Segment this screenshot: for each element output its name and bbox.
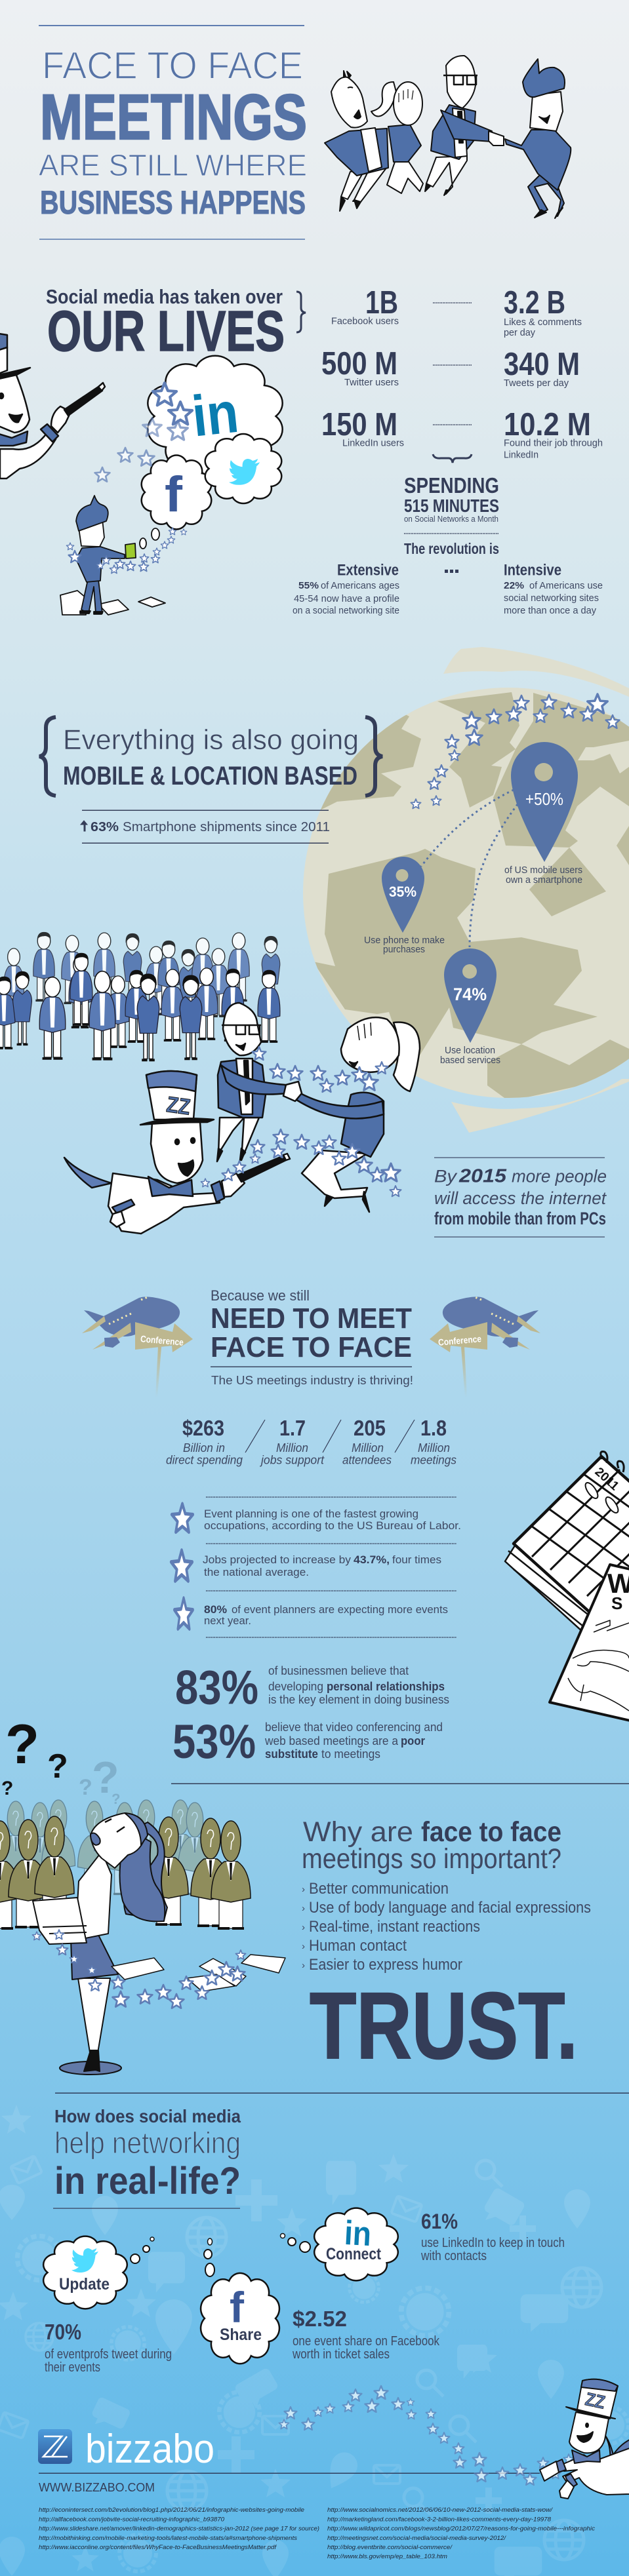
stat: attendees: Million xyxy=(352,1441,384,1454)
fact: fastest growing occupation xyxy=(172,1504,461,1532)
stat: 70 percent twitter: of eventprofs tweet during xyxy=(45,2347,172,2362)
heading: social media has taken over our lives: Social media has taken over xyxy=(46,285,283,308)
illustration: faceless crowd with question marks xyxy=(0,1713,251,1930)
statistic: 83 percent personal relationships: personal relationships xyxy=(327,1680,445,1693)
figure: woman with ponytail xyxy=(371,82,423,193)
stat: 2.52 dollars facebook: $2.52 xyxy=(293,2307,347,2331)
extensive xyxy=(293,561,399,616)
figure: bald man with glasses xyxy=(425,56,504,195)
crescent: bottom arc xyxy=(451,1079,629,1133)
illustration: man with smartphone xyxy=(60,496,165,615)
crescent: top arc xyxy=(443,647,629,697)
statistic: 83 percent personal relationships xyxy=(175,1661,449,1715)
heading: need to meet face to face: Because we still xyxy=(211,1287,310,1304)
bizzabo logo xyxy=(38,2427,214,2472)
cloud: twitter update: Update xyxy=(59,2275,110,2293)
ponytail xyxy=(124,1822,167,1921)
stat: direct spending: direct spending xyxy=(166,1454,243,1467)
map pin: 74 percent xyxy=(440,948,500,1066)
cloud: facebook: f xyxy=(165,467,183,522)
map pin: 35 percent: Use phone to make xyxy=(364,935,445,946)
stat: likes and comments xyxy=(504,285,582,338)
extensive: on a social networking site xyxy=(293,605,399,616)
heading and reasons: why face to face: Why are xyxy=(303,1816,413,1848)
callout: by 2015: 2015 xyxy=(458,1165,507,1186)
front row xyxy=(0,1816,251,1930)
cloud: linkedin connect: in xyxy=(344,2214,373,2254)
stat: jobs support xyxy=(259,1416,325,1467)
extensive: Extensive xyxy=(337,561,399,579)
sources column left: http://allfacebook.com/jobvite-social-recruiting-infographic_b93870 xyxy=(39,2516,224,2522)
stars around clouds xyxy=(66,383,192,574)
heading: need to meet face to face xyxy=(211,1287,413,1387)
stat: likes and comments: 3.2 B xyxy=(504,285,565,321)
callout: by 2015: By xyxy=(434,1167,458,1186)
stat: meetings: 1.8 xyxy=(420,1416,447,1440)
stat: 2.52 dollars facebook xyxy=(292,2307,440,2362)
stat: likes and comments: Likes & comments xyxy=(504,317,582,328)
sources column left: http://econintersect.com/b2evolution/blog1.php/2012/06/21/infographic-websites-going-mobile xyxy=(39,2507,304,2513)
map pin: 74 percent: based services xyxy=(440,1055,500,1066)
illustration: social network thought clouds xyxy=(142,356,283,529)
illustration: magician flying with wand: ZZ xyxy=(165,1092,192,1120)
land masses xyxy=(308,692,629,1101)
map pin: plus 50 percent: of US mobile users xyxy=(504,865,582,876)
extensive: 55% xyxy=(298,580,319,591)
stat: attendees: 205 xyxy=(354,1416,386,1440)
heading: social media has taken over our lives: OUR LIVES xyxy=(47,300,285,363)
heading: everything is also going mobile and location based xyxy=(39,717,382,796)
illustration: woman holding papers xyxy=(33,1813,167,2075)
crowd back row xyxy=(3,932,280,1021)
stat: jobs support: jobs support xyxy=(259,1454,325,1467)
stat: found job through linkedin xyxy=(504,407,603,460)
illustration: calendar and newspaper xyxy=(505,1451,629,1721)
stat: tweets per day: 340 M xyxy=(504,347,580,382)
sources column left xyxy=(39,2507,319,2550)
stat: linkedin users: LinkedIn users xyxy=(342,438,404,448)
fact: fastest growing occupation: Event planning is one of the fastest growing xyxy=(204,1508,418,1520)
statistic: 83 percent personal relationships: of businessmen believe that xyxy=(268,1664,409,1677)
question marks: ? xyxy=(47,1747,68,1786)
crowd middle row xyxy=(0,953,280,1049)
skirt xyxy=(71,1935,118,1980)
blouse xyxy=(75,1852,112,1940)
title block: BUSINESS HAPPENS xyxy=(40,184,306,221)
statistic: 53 percent poor substitute: to meetings xyxy=(321,1747,380,1761)
newspaper: S xyxy=(611,1593,622,1613)
illustration: four business people shaking hands xyxy=(325,56,571,218)
reasons list: Easier to express humor xyxy=(309,1956,462,1974)
magician tail xyxy=(64,1158,112,1188)
intensive xyxy=(504,561,603,616)
newspaper xyxy=(550,1565,629,1721)
sources column right xyxy=(327,2507,596,2560)
map pin: plus 50 percent: +50% xyxy=(525,789,563,809)
illustration: flying magician in footer: ZZ xyxy=(584,2389,607,2413)
heading: how does social media help networking in real-life: How does social media xyxy=(54,2106,241,2126)
stat: likes and comments: per day xyxy=(504,327,535,338)
illustration: magician flying with wand xyxy=(64,1071,290,1234)
statistic: 53 percent poor substitute: 53% xyxy=(172,1715,256,1768)
fact: event planners expecting more events: of event planners are expecting more events xyxy=(232,1603,448,1616)
legs xyxy=(78,1978,110,2065)
illustration: calendar and newspaper: 2011 xyxy=(592,1465,622,1494)
heading: need to meet face to face: NEED TO MEET xyxy=(211,1302,412,1335)
stat: found job through linkedin: LinkedIn xyxy=(504,450,538,460)
question marks: ? xyxy=(112,1791,120,1807)
statistic: 83 percent personal relationships: is the key element in doing business xyxy=(268,1693,449,1706)
flying papers xyxy=(112,1955,285,1991)
intensive: 22% xyxy=(504,580,524,591)
callout: by 2015: will access the internet xyxy=(434,1188,607,1208)
reasons list: › xyxy=(302,1884,305,1895)
heading and reasons: why face to face xyxy=(302,1816,591,2078)
reasons list: › xyxy=(302,1903,305,1914)
sources column right: http://marketingland.com/facebook-3-2-billion-likes-comments-every-day-19978 xyxy=(327,2516,551,2522)
website url: WWW.BIZZABO.COM xyxy=(39,2481,155,2494)
stat: found job through linkedin: 10.2 M xyxy=(504,407,591,442)
intensive: more than once a day xyxy=(504,605,596,616)
reasons list: Use of body language and facial expressions xyxy=(309,1899,591,1917)
horizontal brace xyxy=(433,454,472,463)
sources column right: http://www.bls.gov/emp/ep_table_103.htm xyxy=(327,2553,447,2560)
stars around dancers xyxy=(201,1047,401,1196)
statistic: 53 percent poor substitute xyxy=(172,1715,443,1768)
fact: jobs projected to increase: four times xyxy=(392,1553,441,1566)
crowd front row xyxy=(39,971,202,1061)
cloud: twitter update xyxy=(43,2236,154,2309)
footer magician hat xyxy=(577,2379,618,2419)
map pin: 35 percent: 35% xyxy=(389,884,416,900)
stat: linkedin users: 150 M xyxy=(321,407,397,442)
map pin: 35 percent: purchases xyxy=(383,944,425,955)
dots xyxy=(445,570,458,573)
stat: 61 percent linkedin: use LinkedIn to keep in touch xyxy=(421,2236,565,2250)
dotted arcs between pins xyxy=(421,790,517,947)
fact: fastest growing occupation: occupations, according to the US Bureau of Labor. xyxy=(204,1519,461,1532)
sources column right: http://www.wildapricot.com/blogs/newsblog/2012/07/27/reasons-for-going-mobile---infographic xyxy=(327,2525,596,2531)
stat: 61 percent linkedin: with contacts xyxy=(420,2249,487,2263)
stat: attendees: attendees xyxy=(342,1454,392,1467)
stat: facebook users xyxy=(331,285,399,326)
event planning facts list xyxy=(171,1497,461,1637)
stat: 2.52 dollars facebook: one event share on Facebook xyxy=(293,2334,440,2349)
stat: jobs support: 1.7 xyxy=(279,1416,306,1440)
spending and revolution block xyxy=(293,473,603,616)
heading: how does social media help networking in real-life: help networking xyxy=(54,2126,241,2160)
callout: by 2015: more people xyxy=(512,1167,607,1186)
faded back row xyxy=(0,1800,211,1895)
statistic: 53 percent poor substitute: believe that video conferencing and xyxy=(265,1721,443,1734)
heading: how does social media help networking in real-life: in real-life? xyxy=(54,2160,241,2202)
fact: jobs projected to increase xyxy=(171,1550,441,1581)
sources column left: http://www.slideshare.net/amover/linkedin-demographics-statistics-jan-2012 (see page 17 for source) xyxy=(39,2525,319,2531)
meetings industry statistics xyxy=(166,1416,457,1467)
cloud: linkedin connect xyxy=(281,2208,398,2280)
extensive: 45-54 now have a profile xyxy=(294,593,399,604)
reasons list: Human contact xyxy=(309,1937,407,1955)
stars arcing over globe xyxy=(411,694,619,808)
stat: attendees xyxy=(342,1416,392,1467)
map pin: 35 percent xyxy=(364,857,445,955)
fact: event planners expecting more events: next year. xyxy=(204,1614,251,1627)
spending and revolution block: 515 MINUTES xyxy=(404,496,499,516)
question marks: ? xyxy=(5,1713,39,1776)
stat: found job through linkedin: Found their job through xyxy=(504,438,603,448)
illustration: flying magician in footer xyxy=(540,2379,629,2499)
extensive: of Americans ages xyxy=(321,580,399,591)
illustration: magician pointing a wand xyxy=(0,334,105,478)
reasons list: Better communication xyxy=(309,1880,449,1898)
fact: jobs projected to increase: the national average. xyxy=(204,1566,309,1578)
figure: spiky haired man xyxy=(325,71,388,211)
plane with conference sign, left: Conference xyxy=(140,1333,184,1348)
question marks: ? xyxy=(79,1775,92,1800)
stat: twitter users: 500 M xyxy=(321,346,397,381)
title block xyxy=(39,25,307,240)
figure: man with blue quiff xyxy=(505,59,571,218)
fact: event planners expecting more events: 80% xyxy=(204,1603,227,1616)
map pin: plus 50 percent: own a smartphone xyxy=(506,874,582,886)
plane with conference sign, right: Conference xyxy=(437,1333,482,1348)
stat: facebook users: Facebook users xyxy=(331,316,399,326)
star trail to magician xyxy=(279,2386,574,2485)
cloud: facebook xyxy=(142,456,211,529)
stat: meetings: Million xyxy=(418,1441,450,1454)
fact: event planners expecting more events xyxy=(174,1598,448,1629)
illustration: woman with ponytail dancing xyxy=(283,1017,420,1212)
fact: jobs projected to increase: Jobs projected to increase by xyxy=(203,1553,352,1566)
sources column right: http://www.socialnomics.net/2012/06/06/10-new-2012-social-media-stats-wow/ xyxy=(327,2507,554,2513)
wing xyxy=(604,2434,629,2472)
heading: social media has taken over our lives xyxy=(46,285,285,363)
reasons list: › xyxy=(302,1960,305,1971)
sources column left: http://mobithinking.com/mobile-marketing-tools/latest-mobile-stats/a#smartphone-shipments xyxy=(39,2535,298,2541)
heading and reasons: why face to face: meetings so important? xyxy=(302,1843,561,1875)
sources column left: http://www.iacconline.org/content/files/WhyFace-to-FaceBusinessMeetingsMatter.pdf xyxy=(39,2544,277,2550)
heading: need to meet face to face: The US meetings industry is thriving! xyxy=(211,1374,413,1387)
heading: how does social media help networking in real-life xyxy=(53,2106,241,2209)
map pin: plus 50 percent xyxy=(504,742,582,886)
callout: by 2015 xyxy=(434,1158,607,1238)
question marks: ? xyxy=(1,1778,13,1799)
bizzabo logo: bizzabo xyxy=(85,2427,214,2472)
papers xyxy=(33,1898,87,1944)
statistic: 83 percent personal relationships: developing xyxy=(268,1680,323,1693)
smartphone shipments stat xyxy=(81,810,330,844)
plane with conference sign, right xyxy=(430,1297,540,1397)
cloud: linkedin xyxy=(148,356,283,477)
stat: 70 percent twitter: 70% xyxy=(45,2320,81,2344)
stat: direct spending xyxy=(166,1416,243,1467)
intensive: of Americans use xyxy=(529,580,603,591)
cloud: twitter xyxy=(205,434,281,503)
statistic: 83 percent personal relationships: 83% xyxy=(175,1661,258,1715)
illustration: crowd of networking people xyxy=(0,932,280,1061)
fact: jobs projected to increase: 43.7%, xyxy=(354,1553,390,1566)
reasons list: › xyxy=(302,1941,305,1952)
cloud: facebook share xyxy=(201,2238,279,2364)
stat: direct spending: $263 xyxy=(182,1416,224,1440)
stat: 2.52 dollars facebook: worth in ticket sales xyxy=(292,2347,390,2362)
spending and revolution block: SPENDING xyxy=(404,473,499,498)
title block: FACE TO FACE xyxy=(42,45,303,87)
magician hat xyxy=(146,1071,197,1120)
map pin: 74 percent: Use location xyxy=(445,1045,495,1056)
illustration: bald man with glasses dancing xyxy=(217,1003,287,1161)
social media statistics xyxy=(321,285,603,460)
stat: 70 percent twitter xyxy=(45,2320,172,2375)
title block: ARE STILL WHERE xyxy=(39,148,307,182)
stat: tweets per day: Tweets per day xyxy=(504,378,569,389)
globe with land masses xyxy=(303,647,629,1133)
map pin: 74 percent: 74% xyxy=(453,985,487,1004)
intensive: Intensive xyxy=(504,561,561,579)
question marks: ? xyxy=(92,1753,119,1803)
stat: 61 percent linkedin xyxy=(420,2210,565,2263)
statistic: 53 percent poor substitute: poor xyxy=(401,1734,425,1747)
background pattern: event icons xyxy=(0,2105,628,2576)
title block: MEETINGS xyxy=(40,81,307,153)
stat: 61 percent linkedin: 61% xyxy=(421,2210,458,2233)
stat: twitter users: Twitter users xyxy=(344,377,399,388)
cloud: facebook share: f xyxy=(230,2283,245,2332)
heading: everything is also going mobile and location based: MOBILE & LOCATION BASED xyxy=(63,762,357,790)
heading: everything is also going mobile and location based: Everything is also going xyxy=(63,724,359,756)
heading and reasons: why face to face: face to face xyxy=(421,1816,561,1848)
cloud: linkedin: in xyxy=(189,380,241,449)
plane with conference sign, left xyxy=(82,1297,193,1397)
sources column right: http://meetingsnet.com/social-media/social-media-survey-2012/ xyxy=(327,2535,507,2541)
intensive: social networking sites xyxy=(504,593,599,604)
question marks xyxy=(1,1713,120,1807)
stars around woman xyxy=(32,1930,246,2008)
stat: meetings: meetings xyxy=(411,1454,457,1467)
smartphone shipments stat: 63% xyxy=(91,820,119,834)
cloud: facebook share: Share xyxy=(220,2326,262,2344)
stat: meetings xyxy=(411,1416,457,1467)
stat: facebook users: 1B xyxy=(365,285,398,321)
head xyxy=(91,1813,146,1868)
spending and revolution block: The revolution is xyxy=(404,540,499,557)
cloud: linkedin connect: Connect xyxy=(326,2245,382,2263)
sources column right: http://blog.eventbrite.com/social-commerce/ xyxy=(327,2544,453,2550)
statistic: 53 percent poor substitute: substitute xyxy=(265,1747,318,1761)
brace xyxy=(296,292,306,332)
spending and revolution block: on Social Networks a Month xyxy=(404,514,498,524)
reasons list xyxy=(302,1880,591,1974)
stat: 70 percent twitter: their events xyxy=(45,2360,100,2375)
heading: need to meet face to face: FACE TO FACE xyxy=(211,1331,412,1363)
reasons list: › xyxy=(302,1922,305,1933)
statistic: 53 percent poor substitute: web based meetings are a xyxy=(264,1734,399,1747)
reasons list: Real-time, instant reactions xyxy=(309,1918,480,1936)
stat: jobs support: Million xyxy=(276,1441,308,1454)
stat: direct spending: Billion in xyxy=(183,1441,225,1454)
smartphone shipments stat: Smartphone shipments since 2011 xyxy=(123,820,330,834)
